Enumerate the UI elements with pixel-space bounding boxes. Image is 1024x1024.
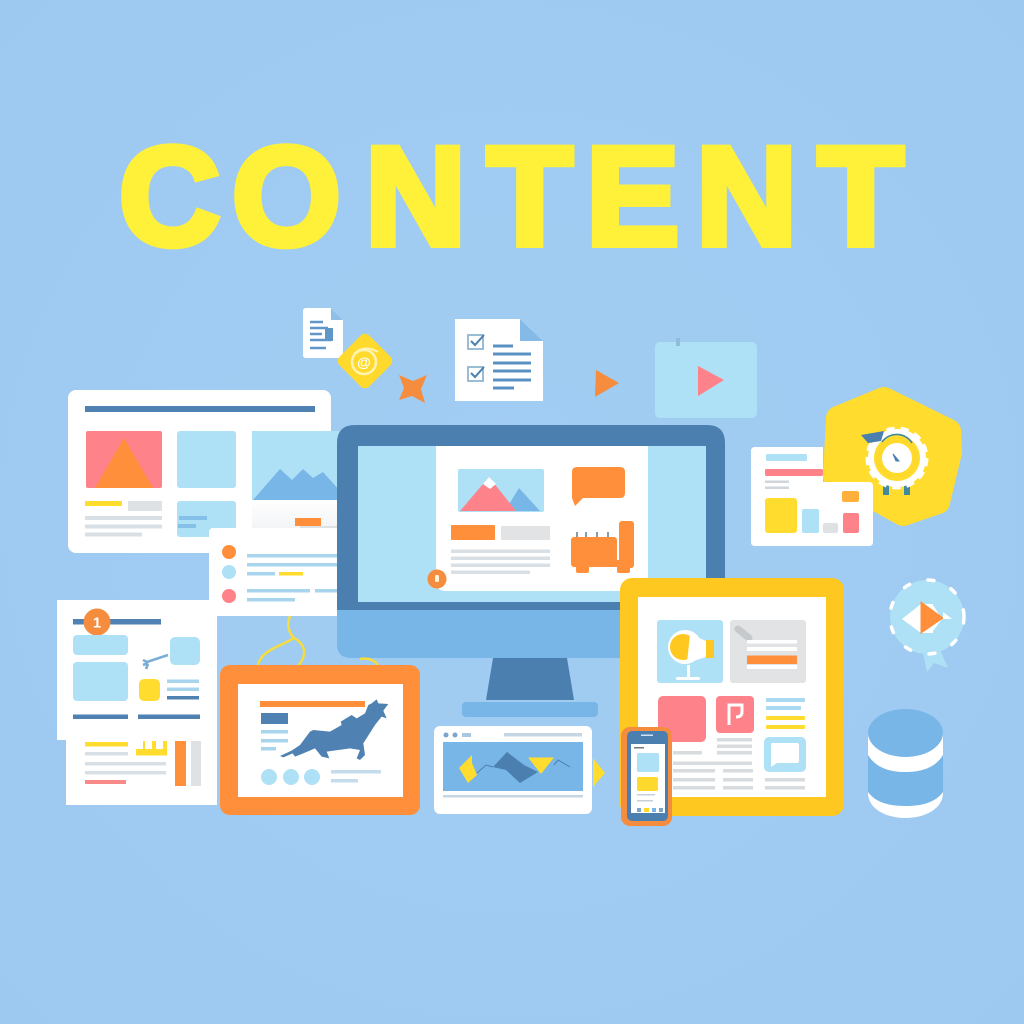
icon: orange star (399, 375, 427, 403)
mountain image (458, 469, 544, 512)
panel: orange tablet (220, 665, 420, 815)
monitor stand (486, 658, 574, 700)
panel: smartphone (621, 727, 672, 826)
P tile (716, 696, 754, 733)
orange device icon (571, 521, 634, 573)
panel: desktop monitor (337, 425, 725, 717)
icon: video panel (655, 338, 757, 418)
screen content page (428, 446, 648, 591)
number badge: 1 (93, 614, 101, 632)
panel: wave chart browser card (434, 726, 605, 814)
title: CONTENT (119, 118, 904, 274)
wrench icon (143, 655, 168, 669)
orange badge (428, 570, 446, 588)
icon: at-sign diamond (335, 331, 395, 391)
panel: top-left web page card (68, 390, 342, 553)
mountain image card (252, 431, 342, 542)
gauge gear (861, 429, 926, 495)
yellow comb chart (136, 741, 167, 756)
monitor chin (337, 606, 725, 658)
icon: at-sign diamond: @ (357, 354, 371, 370)
bull silhouette (280, 699, 388, 760)
yellow hanging cords (258, 616, 378, 666)
chat tile (764, 737, 806, 772)
chart shapes (459, 752, 570, 783)
megaphone tile (657, 620, 723, 683)
number badge (84, 608, 110, 636)
monitor base (462, 702, 598, 717)
icon: orange play arrow (595, 370, 619, 397)
icon: play badge with ribbon (890, 580, 964, 672)
icon: database cylinder (868, 709, 943, 818)
panel: bar chart card (751, 447, 873, 546)
icon: yellow gear hexagon (835, 399, 950, 514)
icon: checklist document (455, 319, 543, 401)
panel: numbered document (57, 600, 217, 740)
panel: yellow tablet (620, 578, 844, 816)
monitor frame (337, 425, 725, 610)
panel: list card (209, 528, 341, 616)
icon: small document (303, 308, 343, 358)
pink image tile with triangle (86, 431, 162, 488)
grey note tile (730, 620, 806, 683)
panel: lower-left document (66, 738, 217, 805)
orange speech bubble (572, 467, 625, 506)
